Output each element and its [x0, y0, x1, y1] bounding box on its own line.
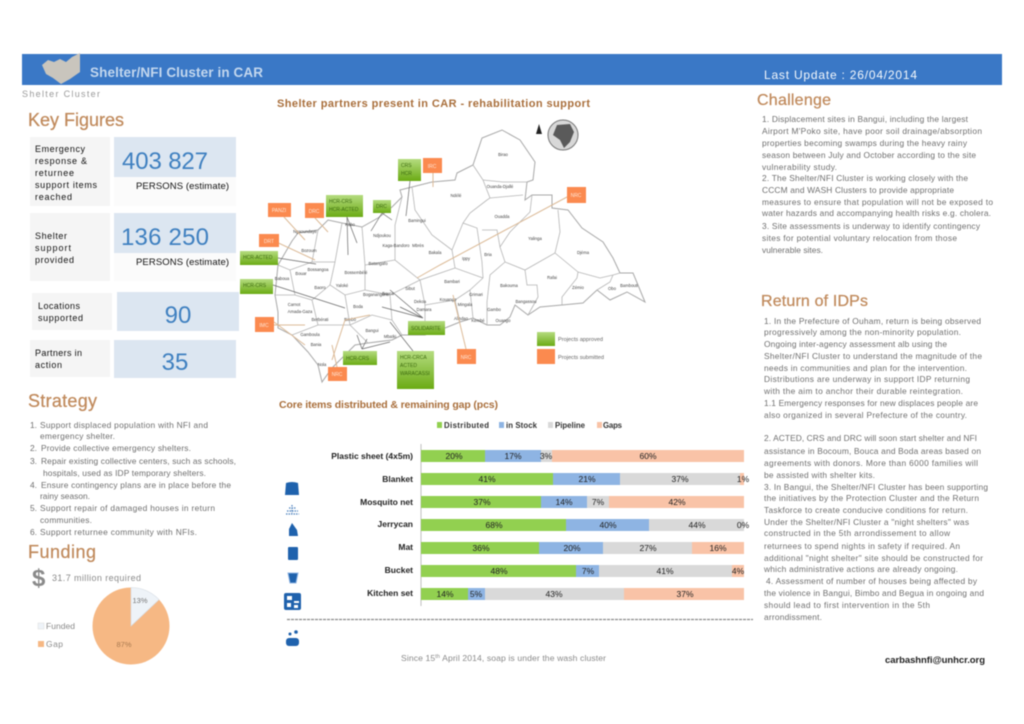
strategy list: Ensure contingency plans are in place before the — [41, 480, 231, 490]
bar: mat — [398, 542, 744, 554]
place names: Mingala — [458, 302, 473, 307]
icon: soap — [286, 630, 299, 646]
return of IDPs text: Shelter/NFI Cluster to understand the magnitude of the — [764, 351, 982, 361]
key figure: shelter support: 136 250 — [121, 224, 209, 251]
divider — [287, 618, 753, 620]
place names: Ouango — [496, 318, 511, 323]
place names: Ouanda-Djallé — [487, 184, 514, 189]
place names: Yalinga — [528, 236, 542, 241]
return of IDPs text: assistance in Bocoum, Bouca and Boda areas based on — [764, 446, 981, 456]
place names: Carnot — [288, 302, 301, 307]
bar: mosquito net: Mosquito net — [360, 497, 413, 507]
place names: Sibut — [405, 286, 416, 291]
partner boxes: submitted: NRC — [571, 193, 582, 199]
place names: Mbaïki — [384, 334, 396, 339]
chart legend: Gaps — [603, 421, 623, 430]
place names: Birao — [498, 152, 509, 157]
place names: Ouadda — [495, 214, 510, 219]
bar: blanket: 37% — [671, 474, 689, 484]
bar: blanket — [382, 473, 750, 485]
heading: key figures: Key Figures — [28, 110, 124, 130]
place names: Amada-Gaza — [288, 309, 313, 314]
bar: plastic sheet — [331, 450, 744, 462]
bar: kitchen set: 37% — [676, 589, 694, 599]
place names: Baoro — [314, 285, 326, 290]
key figure: partners: action — [35, 360, 62, 370]
return of IDPs text: progressively among the non-minority population. — [764, 327, 961, 337]
partner boxes: approved: HCR-CRS — [346, 356, 370, 362]
map legend: Projects approved — [558, 337, 603, 343]
place names: Gamboula — [300, 332, 320, 337]
strategy list: Provide collective emergency shelters. — [41, 443, 191, 453]
partner boxes: submitted: IMC — [259, 323, 269, 329]
bar: blanket: 21% — [578, 474, 596, 484]
return of IDPs text: 3. In Bangui, the Shelter/NFI Cluster has been supporting — [764, 482, 988, 492]
place names: Baboua — [275, 276, 290, 281]
bar: plastic sheet: 20% — [445, 451, 463, 461]
banner title: Shelter/NFI Cluster in CAR — [90, 65, 263, 80]
key figure: items reached: 403 827 — [122, 148, 208, 175]
pie chart: funding: Gap — [46, 639, 63, 649]
bar: jerrycan: 44% — [688, 520, 706, 530]
bar: mat: 27% — [639, 543, 657, 553]
return of IDPs text — [763, 316, 988, 622]
place names: Boda — [353, 304, 364, 309]
bar: blanket: 41% — [478, 474, 496, 484]
strategy list: 1. — [30, 420, 37, 430]
pie chart: funding: 87% — [116, 640, 132, 649]
place names: Kouango — [440, 297, 457, 302]
contact email: carbashnfi@unhcr.org — [885, 655, 985, 666]
strategy list: communities. — [40, 515, 92, 525]
partner boxes: approved: DRC — [376, 204, 387, 210]
place names: Mbrès — [412, 243, 424, 248]
return of IDPs text: be assisted with shelter kits. — [764, 470, 875, 480]
return of IDPs text: the violence in Bangui, Bimbo and Begua in ongoing and — [764, 588, 984, 598]
return of IDPs text: 1.1 Emergency responses for new displaces people are — [764, 398, 978, 408]
key figure: items reached: support items — [35, 180, 98, 190]
bar: kitchen set — [367, 588, 744, 600]
key figure: partners: 35 — [162, 349, 188, 376]
place names: Ippy — [462, 256, 471, 261]
bar: jerrycan: 40% — [599, 520, 617, 530]
partner boxes: approved: HCR — [401, 171, 412, 177]
key figure: locations: Locations — [38, 301, 80, 311]
place names: Yaloké — [336, 283, 349, 288]
key figure: items reached: Emergency — [35, 144, 86, 154]
return of IDPs text: Taskforce to create conducive conditions for return. — [764, 505, 968, 515]
icon: north arrow — [536, 124, 542, 134]
header banner — [22, 53, 1002, 85]
bar: mat: 36% — [472, 543, 490, 553]
return of IDPs text: 2. ACTED, CRS and DRC will soon start shelter and NFI — [764, 433, 977, 443]
icon: jerrycan — [289, 523, 298, 536]
icon: shelter cluster logo — [42, 53, 80, 84]
bar: bucket: 7% — [582, 566, 595, 576]
key figure: items reached: response & — [35, 156, 87, 166]
partner boxes: approved: CRS — [401, 163, 412, 169]
place names: Bania — [311, 342, 322, 347]
return of IDPs text: with the aim to anchor their durable reintegration. — [763, 386, 963, 396]
return of IDPs text: agreements with donors. More than 6000 families will — [764, 458, 978, 468]
partner boxes: submitted: PANZI — [272, 208, 286, 214]
icon: mat — [288, 547, 298, 560]
chart legend: Distributed — [444, 421, 489, 430]
key figure: items reached — [30, 137, 236, 206]
challenge text: CCCM and WASH Clusters to provide appropriate — [762, 185, 954, 195]
partner boxes: approved: HCR-CRCA — [400, 355, 427, 361]
return of IDPs text: which administrative actions are already ongoing. — [763, 564, 958, 574]
key figure: shelter support — [30, 213, 236, 281]
place names: Kaga-Bandoro — [382, 243, 410, 248]
strategy list: 2. — [30, 443, 37, 453]
country outline — [275, 130, 645, 382]
place names: Obo — [608, 286, 617, 291]
bar: jerrycan: Jerrycan — [378, 519, 413, 529]
bar: plastic sheet: 3% — [540, 451, 553, 461]
place names — [275, 152, 638, 367]
place names: Rafai — [547, 275, 557, 280]
place names: Bamingui — [408, 218, 426, 223]
challenge text: vulnerability study. — [762, 162, 837, 172]
place names: Bouca — [382, 291, 395, 296]
heading: return of IDPs: Return of IDPs — [761, 293, 868, 310]
bar: bucket — [385, 565, 745, 577]
partner boxes: approved: HCR-CRS — [329, 199, 353, 205]
challenge text: measures to ensure that population will not be exposed to — [762, 197, 993, 207]
place names: Djéma — [577, 250, 590, 255]
place names: Kabo — [345, 222, 356, 227]
place names: Nola — [318, 362, 327, 367]
heading: map: Shelter partners present in CAR - rehabilitation support — [277, 98, 590, 110]
challenge text: 3. Site assessments is underway to identify contingency — [762, 221, 981, 231]
partner boxes: approved: WARACASSI — [400, 371, 430, 377]
challenge text: water hazards and accompanying health risks e.g. cholera. — [761, 208, 991, 218]
strategy list: Repair existing collective centers, such as schools, — [41, 456, 236, 466]
strategy list: 4. — [30, 480, 37, 490]
heading: core items chart: Core items distributed & remaining gap (pcs) — [279, 399, 498, 411]
bar: plastic sheet: Plastic sheet (4x5m) — [331, 451, 413, 461]
challenge text: 2. The Shelter/NFI Cluster is working closely with the — [762, 173, 968, 183]
bar: mat: 16% — [709, 543, 727, 553]
soap note: th — [435, 654, 440, 660]
place names: Batangafo — [368, 261, 388, 266]
partner boxes: approved: SOLIDARITE — [411, 326, 441, 332]
bar: jerrycan: 68% — [485, 520, 503, 530]
bar: bucket: 48% — [490, 566, 508, 576]
funding requirement: 31.7 million required — [52, 573, 141, 583]
leader lines — [272, 166, 567, 367]
place names: Bossangoa — [308, 267, 329, 272]
prefecture boundaries — [275, 165, 620, 343]
bar: mosquito net — [360, 496, 744, 508]
pie chart: funding: 13% — [132, 596, 148, 605]
bar: mosquito net: 37% — [473, 497, 491, 507]
strategy list: Support returnee community with NFIs. — [40, 527, 197, 537]
strategy list: emergency shelter. — [40, 431, 115, 441]
place names: Ngaoundaye — [293, 229, 318, 234]
bar: plastic sheet: 17% — [504, 451, 522, 461]
return of IDPs text: also organized in several Prefecture of the country. — [764, 410, 967, 420]
place names: Ndélé — [451, 193, 462, 198]
partner boxes: submitted: DRC — [309, 209, 320, 215]
heading: challenge: Challenge — [757, 92, 831, 109]
challenge text: Airport M'Poko site, have poor soil drainage/absorption — [762, 126, 982, 136]
place names: Bangassou — [516, 299, 537, 304]
strategy list: hospitals, used as IDP temporary shelters. — [43, 468, 206, 478]
key figure: partners: Partners in — [35, 348, 82, 358]
bar: blanket: Blanket — [382, 474, 413, 484]
partner boxes: submitted: NRC — [461, 355, 472, 361]
bar: jerrycan: 0% — [737, 520, 750, 530]
return of IDPs text: arrondissment. — [764, 612, 822, 622]
place names: Bria — [484, 252, 492, 257]
place names: Bimbo — [344, 317, 357, 322]
place names: Bambari — [444, 279, 460, 284]
pie chart: funding — [38, 588, 170, 664]
return of IDPs text: Distributions are underway in support IDP returning — [764, 374, 970, 384]
place names: Ndjoukou — [373, 233, 392, 238]
return of IDPs text: the initiatives by the Protection Cluster and the Return — [764, 493, 979, 503]
strategy list: Support displaced population with NFI and — [40, 420, 208, 430]
bar: bucket: 4% — [732, 566, 745, 576]
pie chart: funding: Funded — [46, 621, 75, 631]
map legend — [537, 332, 604, 364]
partner boxes: approved: ACTED — [400, 363, 417, 369]
map legend: Projects submitted — [558, 355, 604, 361]
bar: mosquito net: 14% — [555, 497, 573, 507]
place names: Bouar — [295, 271, 307, 276]
return of IDPs text: additional "night shelter" site should be constructed for — [764, 553, 983, 563]
key figure: locations: supported — [38, 313, 83, 323]
challenge text: sites for potential voluntary relocation from those — [762, 233, 957, 243]
challenge text — [761, 114, 993, 255]
strategy list: 6. — [30, 527, 37, 537]
partner boxes: submitted: DRT — [264, 239, 274, 245]
icon: dollar sign: $ — [32, 565, 46, 592]
bar: mat: 20% — [563, 543, 581, 553]
challenge text: vulnerable sites. — [762, 245, 823, 255]
chart legend: Pipeline — [555, 421, 586, 430]
key figure: shelter support: PERSONS (estimate) — [136, 257, 229, 268]
key figure: locations: 90 — [165, 302, 191, 329]
return of IDPs text: Ongoing inter-agency assessment alb using the — [764, 339, 947, 349]
partner boxes: submitted — [255, 158, 586, 381]
map: partners in CAR — [240, 120, 645, 389]
chart legend: in Stock — [506, 421, 538, 430]
return of IDPs text: constructed in the 5th arrondissement to allow — [764, 528, 951, 538]
bar: mosquito net: 42% — [668, 497, 686, 507]
place names: Boganangone — [363, 292, 390, 297]
funding requirement — [32, 565, 141, 592]
soap note: Since 15 — [401, 653, 435, 663]
bar: kitchen set: 5% — [470, 589, 483, 599]
strategy list: 3. — [30, 456, 37, 466]
partner boxes: approved: HCR-CRS — [243, 283, 267, 289]
return of IDPs text: Under the Shelter/NFI Cluster a "night shelters" was — [764, 517, 969, 527]
place names: Berbérati — [312, 317, 329, 322]
icon: kitchen set — [284, 593, 301, 610]
heading: strategy: Strategy — [28, 391, 97, 411]
key figure: items reached: reached — [35, 192, 72, 202]
place names: Bangui — [365, 328, 379, 333]
heading: funding: Funding — [28, 542, 96, 562]
icon: globe — [548, 120, 578, 150]
key figure: shelter support: support — [35, 243, 71, 253]
place names: Kembé — [471, 318, 485, 323]
bar: bucket: 41% — [656, 566, 674, 576]
return of IDPs text: returnees to spend nights in safety if required. An — [764, 541, 960, 551]
place names: Bambouti — [620, 283, 638, 288]
return of IDPs text: 4. Assessment of number of houses being affected by — [766, 576, 978, 586]
bar: mosquito net: 7% — [592, 497, 605, 507]
challenge text: 1. Displacement sites in Bangui, including the largest — [762, 114, 969, 124]
partner boxes: approved: HCR-ACTED — [243, 255, 273, 261]
place names: Damara — [417, 307, 432, 312]
place names: Gambo — [487, 307, 502, 312]
stacked bar chart — [331, 444, 750, 606]
return of IDPs text: should lead to first intervention in the 5th — [764, 600, 930, 610]
challenge text: properties becoming swamps during the heavy rainy — [762, 138, 968, 148]
key figure: items reached: PERSONS (estimate) — [136, 181, 229, 192]
place names: Bakala — [429, 250, 442, 255]
partner boxes: approved — [240, 159, 445, 389]
bar: kitchen set: Kitchen set — [367, 588, 413, 598]
icon: plastic sheet — [285, 482, 299, 495]
last update: Last Update : 26/04/2014 — [764, 68, 917, 82]
return of IDPs text: needs in communities and plan for the intervention. — [764, 363, 967, 373]
chart legend — [437, 421, 623, 430]
place names: Bakouma — [500, 283, 519, 288]
bar: bucket: Bucket — [385, 565, 413, 575]
bar: kitchen set: 14% — [436, 589, 454, 599]
shelter cluster caption: Shelter Cluster — [22, 89, 100, 99]
partner boxes: submitted: IRC — [428, 164, 437, 170]
bar: jerrycan — [378, 519, 750, 531]
place names: Bossembélé — [344, 270, 368, 275]
bar: plastic sheet: 60% — [639, 451, 657, 461]
key figure: locations — [32, 292, 239, 331]
icon: bucket — [288, 573, 298, 583]
key figure: partners — [30, 340, 236, 378]
strategy list: rainy season. — [40, 491, 90, 501]
bar: kitchen set: 43% — [545, 589, 563, 599]
bar: blanket: 1% — [737, 474, 750, 484]
place names: Grimari — [469, 292, 483, 297]
place names: Alindao — [454, 316, 469, 321]
key figure: shelter support: Shelter — [35, 231, 67, 241]
soap note: April 2014, soap is under the wash cluster — [440, 653, 606, 663]
key figure: items reached: returnee — [35, 168, 74, 178]
place names: Dekoa — [414, 299, 427, 304]
strategy list — [30, 420, 236, 537]
strategy list: Support repair of damaged houses in return — [40, 503, 215, 513]
place names: Zémio — [572, 285, 584, 290]
key figure: shelter support: provided — [35, 255, 74, 265]
challenge text: season between July and October according to the site — [762, 150, 976, 160]
bar: mat: Mat — [398, 542, 413, 552]
return of IDPs text: 1. In the Prefecture of Ouham, return is being observed — [764, 316, 981, 326]
partner boxes: submitted: NRC — [332, 372, 343, 378]
strategy list: 5. — [30, 503, 37, 513]
partner boxes: approved: HCR-ACTED — [329, 207, 359, 213]
place names: Bozoum — [301, 248, 317, 253]
icon: mosquito net — [286, 505, 299, 514]
